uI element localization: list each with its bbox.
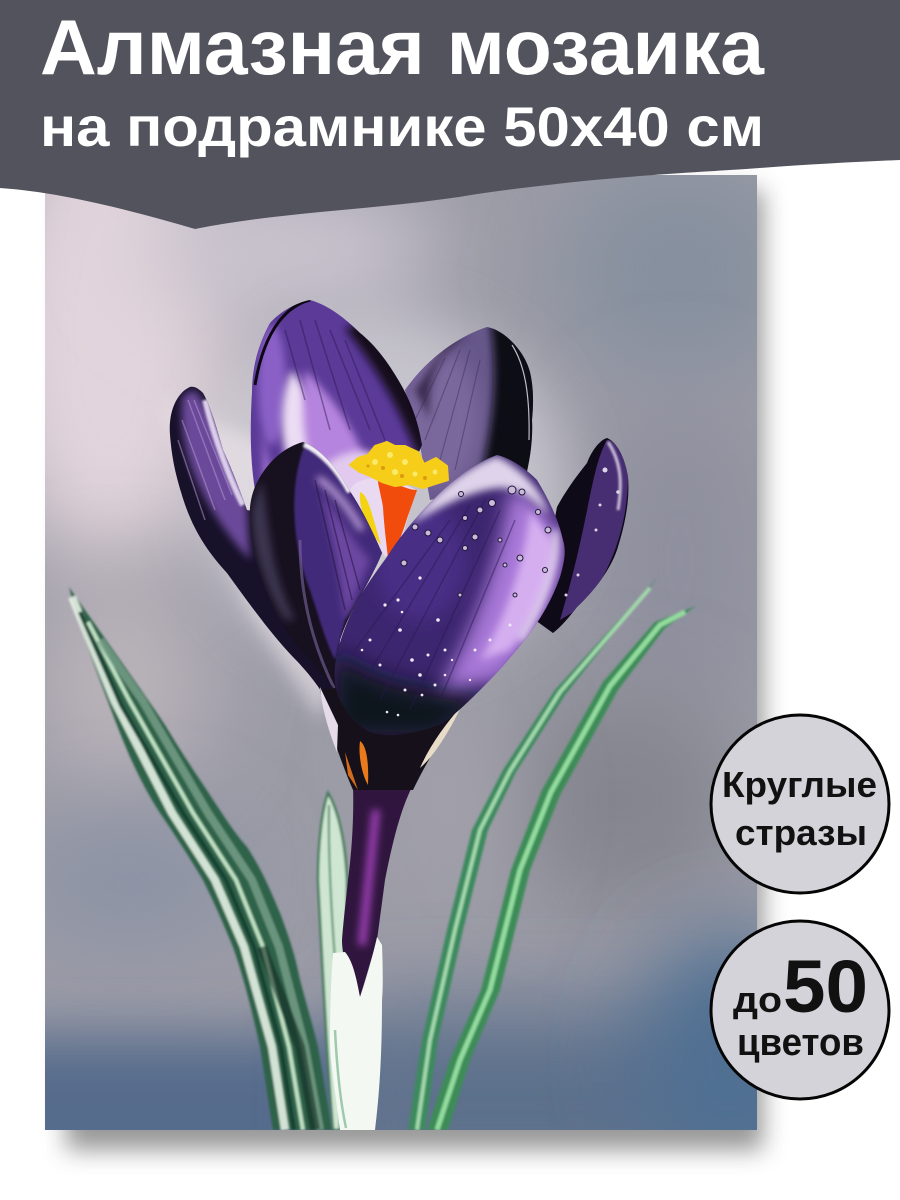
title (40, 3, 765, 158)
badge: round rhinestones: Круглые (722, 764, 877, 805)
petal: far right back (405, 327, 534, 500)
badge: round rhinestones (711, 715, 889, 893)
yellow pollen crown (350, 442, 448, 488)
badge: round rhinestones: стразы (735, 812, 867, 853)
stem (342, 785, 413, 997)
header banner (0, 0, 900, 229)
painting: crocus canvas (45, 175, 757, 1130)
petal: front left (250, 442, 382, 688)
petal: front large with droplets (330, 450, 570, 740)
badge: up to 50 colours: до (733, 979, 782, 1020)
leaf: right thin inner (408, 577, 658, 1130)
leaf: small centre (318, 793, 347, 1130)
badge: up to 50 colours (711, 921, 889, 1099)
title line 2: на подрамнике 50х40 см (40, 95, 764, 158)
stamen (350, 442, 448, 558)
throat (350, 478, 416, 557)
orange style (378, 480, 417, 556)
leaf: wide left (69, 587, 332, 1130)
flower (160, 295, 635, 790)
petal: tall back (250, 300, 422, 494)
yellow stigma (360, 492, 381, 545)
droplets (401, 486, 551, 597)
calyx base (320, 680, 462, 790)
petal slivers and orange marks (320, 687, 338, 752)
badge: up to 50 colours: цветов (737, 1022, 864, 1064)
white sheath (330, 937, 383, 1130)
canvas drop shadow (66, 190, 763, 1150)
leaf: right thin outer (427, 606, 696, 1130)
halo behind flower (160, 315, 570, 720)
petal: far left (170, 386, 336, 690)
badge: up to 50 colours: 50 (783, 945, 868, 1028)
petal: far right (538, 438, 628, 633)
title line 1: Алмазная мозаика (40, 3, 765, 91)
painting background (45, 175, 757, 1130)
